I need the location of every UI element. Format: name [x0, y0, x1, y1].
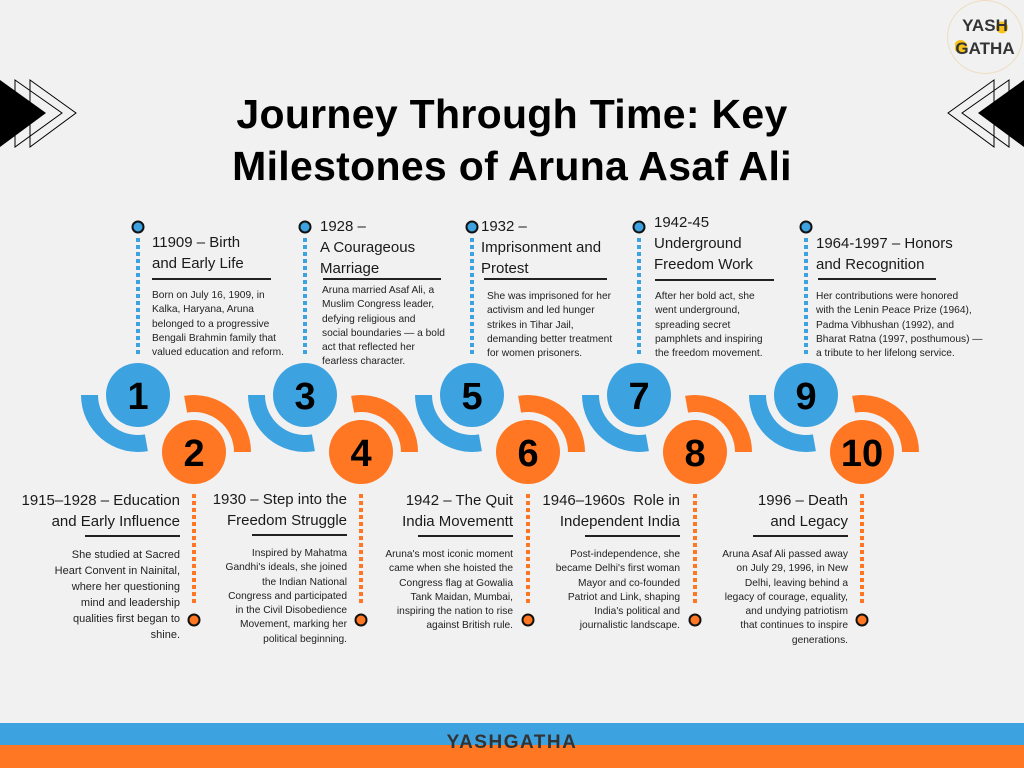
panel 7: After her bold act, she: [655, 291, 755, 302]
timeline circles: 3: [294, 376, 316, 418]
panel 3: A Courageous: [320, 239, 415, 256]
title: Journey Through Time: Key: [236, 91, 788, 137]
panel 1: Kalka, Haryana, Aruna: [152, 304, 254, 315]
panel 7: Underground: [654, 235, 742, 252]
panel 6: Congress flag at Gowalia: [399, 578, 513, 589]
panel 9: a tribute to her lifelong service.: [816, 348, 955, 359]
panel 2: and Early Influence: [52, 513, 180, 530]
panel 6: Tank Maidan, Mumbai,: [410, 592, 513, 603]
panel 6: [385, 492, 514, 631]
logo: YASH: [962, 16, 1008, 35]
panel 10: Delhi, leaving behind a: [745, 578, 848, 589]
panel 7: went underground,: [655, 305, 740, 316]
timeline circles: 2: [183, 433, 205, 475]
panel 1: Bengali Brahmin family that: [152, 333, 276, 344]
panel 8: journalistic landscape.: [580, 620, 680, 631]
panel 3: 1928 –: [320, 218, 366, 235]
panel 8: Mayor and co-founded: [578, 578, 680, 589]
timeline circles: 6: [517, 433, 539, 475]
panel 1: valued education and reform.: [152, 347, 284, 358]
panel 4: Movement, marking her: [240, 619, 347, 630]
panel 10: and Legacy: [770, 513, 848, 530]
panel 6: 1942 – The Quit: [406, 492, 513, 509]
panel 4: Congress and participated: [228, 591, 347, 602]
panel 10: and undying patriotism: [745, 606, 848, 617]
panel 1: Born on July 16, 1909, in: [152, 290, 265, 301]
panel 2: where her questioning: [72, 581, 180, 593]
timeline circles: 10: [841, 433, 883, 475]
panel 3: Marriage: [320, 260, 379, 277]
timeline circles: 4: [350, 433, 372, 475]
panel 3: defying religious and: [322, 314, 415, 325]
panel 6: India Movementt: [402, 513, 513, 530]
panel 7: the freedom movement.: [655, 348, 763, 359]
panel 1: belonged to a progressive: [152, 319, 269, 330]
panel 3: social boundaries — a bold: [322, 328, 445, 339]
panel 3: [320, 218, 445, 367]
panel 4: Inspired by Mahatma: [252, 548, 347, 559]
panel 5: 1932 –: [481, 218, 527, 235]
panel 1: and Early Life: [152, 255, 244, 272]
panel 10: that continues to inspire: [740, 620, 848, 631]
panel 9: Bharat Ratna (1997, posthumous) —: [816, 334, 982, 345]
panel 10: generations.: [792, 635, 848, 646]
panel 4: in the Civil Disobedience: [235, 605, 347, 616]
panel 9: and Recognition: [816, 256, 924, 273]
panel 2: She studied at Sacred: [72, 549, 180, 561]
panel 2: [22, 492, 180, 641]
panel 4: the Indian National: [262, 577, 347, 588]
panel 5: Imprisonment and: [481, 239, 601, 256]
title: Milestones of Aruna Asaf Ali: [232, 143, 792, 189]
panel 1: [152, 234, 284, 358]
decorative chevrons: [0, 79, 1024, 148]
panel 6: against British rule.: [426, 620, 513, 631]
timeline circles: 1: [127, 376, 149, 418]
panel 6: Aruna's most iconic moment: [385, 549, 513, 560]
panel 10: on July 29, 1996, in New: [736, 563, 848, 574]
panel 8: became Delhi's first woman: [556, 563, 680, 574]
timeline circles: 9: [795, 376, 817, 418]
timeline circles: 5: [461, 376, 483, 418]
panel 9: 1964-1997 – Honors: [816, 235, 953, 252]
panel 7: 1942-45: [654, 214, 709, 231]
panel 4: political beginning.: [263, 634, 347, 645]
panel 4: [213, 491, 348, 645]
panel 9: with the Lenin Peace Prize (1964),: [816, 305, 972, 316]
panel 10: Aruna Asaf Ali passed away: [722, 549, 848, 560]
footer bar: [0, 723, 1024, 768]
panel 8: India's political and: [594, 606, 680, 617]
logo: GATHA: [955, 39, 1015, 58]
panel 8: [542, 492, 680, 631]
panel 3: act that reflected her: [322, 342, 415, 353]
panel 3: Muslim Congress leader,: [322, 299, 434, 310]
panel 2: mind and leadership: [81, 597, 180, 609]
panel 3: fearless character.: [322, 356, 405, 367]
panel 4: 1930 – Step into the: [213, 491, 347, 508]
footer brand: YASHGATHA: [447, 732, 577, 753]
panel 6: inspiring the nation to rise: [397, 606, 513, 617]
logo: [947, 0, 1023, 74]
panel 8: 1946–1960s Role in: [542, 492, 680, 509]
panel 5: strikes in Tihar Jail,: [487, 320, 574, 331]
panel 7: spreading secret: [655, 320, 730, 331]
panel 9: Padma Vibhushan (1992), and: [816, 320, 954, 331]
panel 9: [816, 235, 982, 359]
panel 7: pamphlets and inspiring: [655, 334, 763, 345]
panel 8: Independent India: [560, 513, 680, 530]
panel 10: [722, 492, 848, 646]
panel 7: Freedom Work: [654, 256, 753, 273]
panel 3: Aruna married Asaf Ali, a: [322, 285, 434, 296]
panel 5: activism and led hunger: [487, 305, 595, 316]
timeline circles: 8: [684, 433, 706, 475]
panel 2: 1915–1928 – Education: [22, 492, 180, 509]
panel 1: 11909 – Birth: [152, 234, 240, 251]
panel 10: 1996 – Death: [758, 492, 848, 509]
panel 4: Gandhi's ideals, she joined: [226, 562, 347, 573]
timeline circles: 7: [628, 376, 650, 418]
panel 7: [654, 214, 774, 359]
panel 2: shine.: [151, 629, 180, 641]
panel 2: qualities first began to: [73, 613, 180, 625]
title: [232, 91, 792, 189]
panel 8: Post-independence, she: [570, 549, 680, 560]
panel 4: Freedom Struggle: [227, 512, 347, 529]
panel 5: [481, 218, 612, 359]
panel 6: came when she hoisted the: [389, 563, 513, 574]
panel 2: Heart Convent in Nainital,: [55, 565, 180, 577]
panel 5: Protest: [481, 260, 529, 277]
panel 5: for women prisoners.: [487, 348, 582, 359]
panel 5: She was imprisoned for her: [487, 291, 611, 302]
panel 8: Patriot and Link, shaping: [568, 592, 680, 603]
panel 9: Her contributions were honored: [816, 291, 958, 302]
panel 10: legacy of courage, equality,: [725, 592, 848, 603]
panel 5: demanding better treatment: [487, 334, 612, 345]
